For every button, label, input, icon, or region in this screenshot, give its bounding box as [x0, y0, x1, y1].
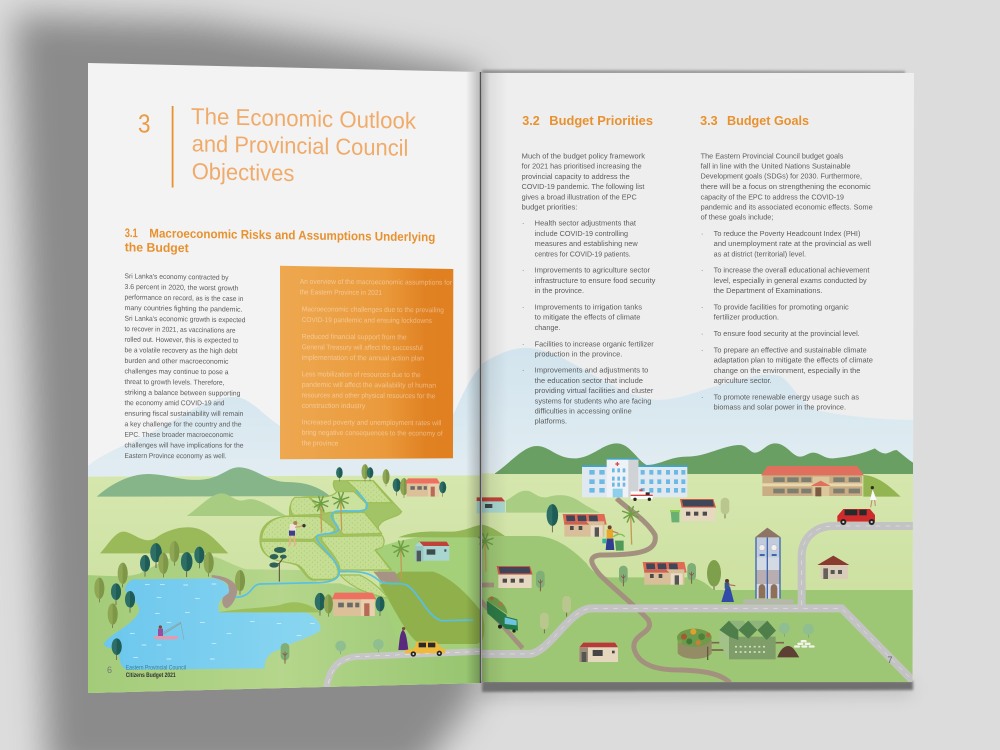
- title: and Provincial Council: [192, 130, 408, 161]
- text column: budget goals: level, especially in general exams conducted by: [714, 278, 867, 285]
- orange callout box: pandemic will affect the availability of human: [302, 382, 436, 390]
- clock tower: [743, 528, 793, 604]
- orange callout box: implementation of the annual action plan: [302, 355, 424, 363]
- text column: budget priorities: to mitigate the effects of climate: [535, 315, 641, 322]
- title: The Economic Outlook: [191, 103, 416, 134]
- body text left: to recover in 2021, as vaccinations are: [124, 326, 236, 335]
- heading 3.3: Budget Goals: [727, 114, 809, 128]
- heading 3.2: Budget Priorities: [549, 114, 653, 128]
- body text left: a key challenge for the country and the: [124, 421, 242, 429]
- orange callout box: Increased poverty and unemployment rates will: [302, 419, 442, 427]
- text column: budget priorities: ·: [522, 368, 524, 375]
- text column: budget priorities: centres for COVID-19 patients.: [535, 251, 631, 258]
- woman in blue: [721, 579, 735, 602]
- body text left: be a volatile recovery as the high debt: [124, 347, 238, 355]
- text column: budget priorities: Improvements to irrigation tanks: [535, 305, 643, 312]
- terraced fields: [260, 481, 402, 598]
- chapter number: 3: [138, 108, 150, 138]
- text column: budget goals: ·: [701, 394, 703, 401]
- trees: [94, 464, 446, 664]
- orange callout box: Less mobilization of resources due to the: [302, 371, 421, 379]
- text column: budget priorities: ·: [522, 268, 524, 275]
- fertilizer bags: [794, 640, 815, 648]
- body text left: threat to growth levels. Therefore,: [124, 379, 225, 387]
- orange callout box: COVID-19 pandemic and ensuing lockdowns: [302, 317, 432, 325]
- left page cast shadow: [15, 15, 480, 750]
- spine line: [480, 72, 481, 683]
- text column: budget goals: agriculture sector.: [714, 378, 772, 385]
- body text left: the economy amid COVID-19 and: [124, 400, 225, 407]
- body text left: burden and other macroeconomic: [124, 358, 229, 366]
- text column: budget priorities: [522, 153, 656, 426]
- orange callout box: Reduced financial support from the: [302, 334, 407, 341]
- text column: budget priorities: Improvements to agriculture sector: [535, 268, 651, 275]
- body text left: [124, 273, 246, 460]
- text column: budget goals: To ensure food security at the provincial level.: [714, 331, 860, 338]
- bank: [212, 575, 237, 608]
- text column: budget goals: ·: [701, 268, 703, 275]
- mountain range: [495, 443, 917, 474]
- title: [191, 103, 416, 189]
- ambulance: [631, 489, 653, 501]
- lake: [104, 578, 321, 670]
- olive field at spine: [482, 614, 484, 640]
- heading 3.3: 3.3: [700, 114, 718, 128]
- orange callout box: the Eastern Province in 2021: [300, 289, 382, 297]
- body text left: challenges may continue to pose a: [124, 368, 229, 376]
- text column: budget goals: To provide facilities for promoting organic: [714, 305, 849, 312]
- text column: budget goals: ·: [701, 348, 703, 355]
- orange callout box: General Treasury will affect the successful: [302, 344, 423, 352]
- house beside lake: [332, 593, 376, 616]
- text column: budget goals: fall in line with the United Nations Sustainable: [701, 164, 851, 171]
- woman in purple: [398, 627, 408, 650]
- orange callout box: resources and other physical resources for the: [302, 392, 435, 400]
- text column: budget priorities: measures and establishing new: [535, 241, 639, 248]
- text column: budget priorities: change.: [535, 325, 560, 332]
- far mountains: [97, 467, 330, 497]
- palms: [477, 507, 639, 572]
- panel: right page: [477, 73, 917, 687]
- house top: [405, 478, 440, 497]
- palms: [313, 493, 495, 579]
- text column: budget goals: the Department of Examinations.: [714, 288, 822, 295]
- text column: budget priorities: infrastructure to ensure food security: [535, 278, 656, 285]
- footer left: Citizens Budget 2021: [126, 673, 176, 679]
- fisherman in boat: [153, 622, 184, 640]
- mid hills: [187, 493, 287, 516]
- text column: budget priorities: Improvements and adjustments to: [535, 368, 649, 375]
- roads: [480, 526, 917, 681]
- footer left: Eastern Provincial Council: [126, 664, 186, 672]
- heading 3.1: Macroeconomic Risks and Assumptions Underlying: [149, 226, 435, 244]
- school: [761, 466, 864, 496]
- text column: budget priorities: in the province.: [535, 288, 584, 295]
- sky hills: [480, 348, 916, 480]
- body text left: striking a balance between supporting: [124, 390, 241, 398]
- small hill left: [506, 491, 600, 513]
- orange callout box: construction industry: [302, 403, 366, 410]
- title rule: [172, 106, 174, 188]
- text column: budget goals: To prepare an effective and sustainable climate: [714, 348, 867, 355]
- pipes: [712, 643, 784, 650]
- orange callout box: [280, 266, 453, 459]
- text column: budget goals: and unemployment rate at the provincial as well: [714, 241, 871, 248]
- spine shadow left: [466, 72, 481, 683]
- olive hills: [100, 527, 228, 553]
- body text left: performance on record, as is the case in: [124, 294, 244, 303]
- body text left: 3.6 percent in 2020, the worst growth: [124, 284, 239, 293]
- text column: budget goals: there will be a focus on strengthening the economic: [701, 184, 871, 191]
- heading 3.1: the Budget: [125, 240, 190, 255]
- left page landscape: [88, 368, 480, 693]
- strip of land in the lake: [218, 602, 321, 612]
- text column: budget priorities: platforms.: [535, 419, 567, 426]
- text column: budget goals: adaptation plan to mitigate the effects of climate: [714, 358, 873, 365]
- heading 3.2: 3.2: [522, 114, 540, 128]
- text column: budget goals: fertilizer production.: [714, 315, 779, 322]
- text column: budget priorities: providing virtual facilities and cluster: [535, 388, 654, 395]
- text column: budget goals: To increase the overall educational achievement: [714, 268, 869, 275]
- orange callout box: Macroeconomic challenges due to the prevailing: [302, 306, 444, 314]
- text column: budget goals: as at district (territorial) level.: [714, 251, 806, 258]
- text column: budget priorities: COVID-19 pandemic. The following list: [522, 184, 644, 191]
- text column: budget goals: change on the environment, especially in the: [714, 368, 860, 375]
- text column: budget priorities: Health sector adjustments that: [535, 221, 636, 228]
- lake ripples: [130, 584, 315, 659]
- olive hill at spine: [480, 524, 505, 536]
- brown roof house: [817, 556, 849, 579]
- orange callout box: An overview of the macroeconomic assumptions for: [300, 279, 453, 287]
- lower meadow: [480, 536, 917, 687]
- text column: budget priorities: the education sector that include: [535, 378, 643, 385]
- fertilizer factory: [719, 621, 776, 659]
- footer left: [107, 664, 186, 679]
- text column: budget priorities: production in the province.: [535, 351, 622, 358]
- garbage truck: [487, 596, 518, 633]
- body text left: Eastern Province economy as well.: [124, 453, 227, 460]
- text column: budget priorities: Much of the budget policy framework: [522, 153, 646, 160]
- text column: budget priorities: gives a broad illustration of the EPC: [522, 194, 637, 201]
- right page top shadow: [482, 70, 905, 74]
- text column: budget goals: ·: [701, 331, 703, 338]
- text column: budget priorities: provincial capacity to address the: [522, 174, 630, 181]
- footer left: 6: [107, 665, 112, 675]
- sky hills: [88, 365, 482, 480]
- text column: budget goals: Development goals (SDGs) for 2030. Furthermore,: [701, 174, 862, 181]
- right page soft shadow: [482, 682, 912, 700]
- brown patch: [373, 572, 400, 582]
- teal house at spine: [480, 497, 505, 513]
- text column: budget goals: pandemic and its associated economic effects. Some: [701, 205, 873, 212]
- river: [235, 491, 473, 621]
- body text left: rolled out. However, this is expected to: [124, 337, 239, 345]
- ground: [482, 473, 913, 650]
- orange callout box: bring negative consequences to the economy of: [302, 430, 443, 438]
- body text left: EPC. These broader macroeconomic: [124, 432, 234, 439]
- solar houses: [497, 499, 716, 588]
- text column: budget priorities: systems for students who are facing: [535, 398, 652, 405]
- road: [326, 651, 483, 692]
- woman with bin: [602, 525, 618, 550]
- body text left: challenges will have implications for the: [124, 442, 244, 450]
- heading 3.1: 3.1: [125, 226, 138, 240]
- text column: budget priorities: ·: [522, 305, 524, 312]
- body text left: many countries fighting the pandemic.: [124, 305, 243, 314]
- right page landscape: [477, 348, 917, 687]
- text column: budget goals: ·: [701, 305, 703, 312]
- text column: budget priorities: for 2021 has prioritised increasing the: [522, 164, 642, 171]
- teal house at the spine: [476, 497, 480, 514]
- teal house: [415, 542, 449, 561]
- text column: budget priorities: ·: [522, 341, 524, 348]
- olive hill right: [863, 475, 901, 497]
- bonsai tree: [269, 547, 287, 582]
- text column: budget goals: biomass and solar power in the province.: [714, 405, 846, 412]
- right meadow: [375, 535, 483, 650]
- text column: budget goals: of these goals include;: [701, 215, 773, 222]
- text column: budget goals: [701, 153, 873, 412]
- text column: budget priorities: include COVID-19 controlling: [535, 231, 628, 238]
- yellow car: [405, 641, 445, 657]
- brown path: [592, 498, 730, 683]
- page number 7: 7: [888, 655, 893, 665]
- text column: budget priorities: difficulties in accessing online: [535, 409, 632, 416]
- heading 3.1: [125, 226, 435, 259]
- body text left: Sri Lanka's economic growth is expected: [124, 316, 246, 324]
- text column: budget goals: To promote renewable energy usage such as: [714, 394, 860, 401]
- red car: [837, 509, 875, 525]
- text column: budget priorities: budget priorities:: [522, 205, 577, 212]
- text column: budget priorities: Facilities to increase organic fertilizer: [535, 341, 654, 348]
- ground: [80, 475, 483, 703]
- text column: budget goals: To reduce the Poverty Headcount Index (PHI): [714, 231, 860, 238]
- waste bins: [613, 510, 680, 551]
- text column: budget priorities: ·: [522, 221, 524, 228]
- text column: budget goals: ·: [701, 231, 703, 238]
- trees: [536, 498, 814, 638]
- hospital: [582, 458, 688, 497]
- spine shadow right: [482, 73, 508, 682]
- farmer: [289, 521, 306, 546]
- olive field: [380, 572, 486, 644]
- orange callout box: the province: [302, 440, 338, 448]
- text column: budget goals: capacity of the EPC to address the COVID-19: [701, 194, 844, 201]
- woman in white: [870, 486, 877, 507]
- text column: budget goals: The Eastern Provincial Council budget goals: [701, 153, 844, 160]
- back olive hill: [398, 525, 483, 537]
- body text left: ensuring fiscal sustainability will remain: [124, 411, 244, 418]
- panel: left page: [80, 63, 501, 703]
- compost tub: [677, 629, 712, 660]
- soil pile: [777, 646, 799, 657]
- body text left: Sri Lanka's economy contracted by: [124, 273, 229, 282]
- title: Objectives: [192, 158, 294, 186]
- right page edge shadow: [482, 681, 913, 692]
- red roof house: [579, 643, 618, 662]
- lower meadow: [80, 553, 483, 703]
